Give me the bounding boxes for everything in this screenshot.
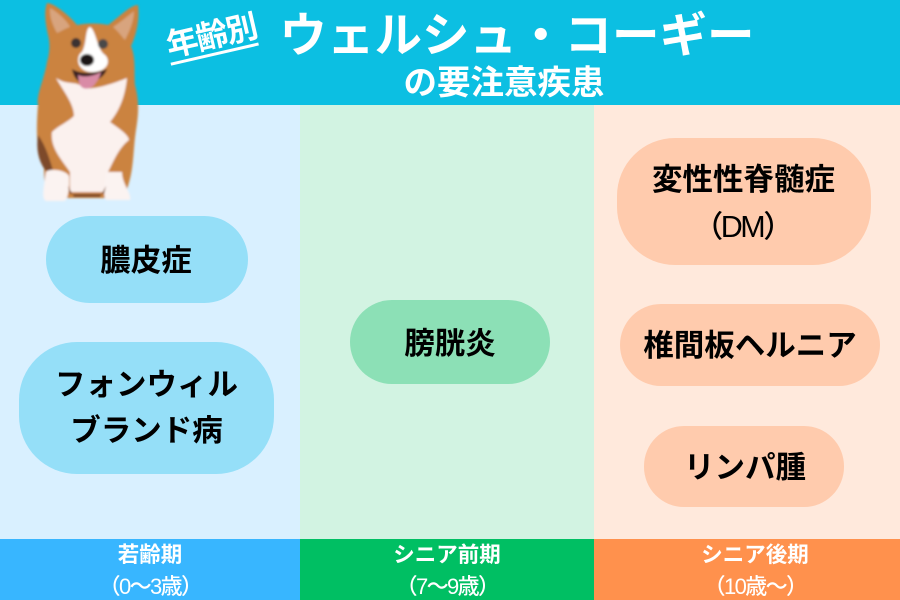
panel: early senior column xyxy=(300,105,594,539)
pill: skin disease: 膿皮症 xyxy=(100,244,192,278)
footer: late senior: （10歳〜） xyxy=(704,574,806,599)
footer: early senior: （7〜9歳） xyxy=(396,574,498,599)
footer: late senior: シニア後期 xyxy=(701,543,809,567)
pill: degenerative myelopathy: （DM） xyxy=(693,210,791,244)
footer: young: 若齢期 xyxy=(118,543,182,567)
header band xyxy=(0,0,900,105)
pill: lymphoma: リンパ腫 xyxy=(684,451,806,485)
pill: lymphoma xyxy=(644,426,844,507)
footer: late senior xyxy=(594,539,900,600)
footer: young xyxy=(0,539,300,600)
panel: late senior column xyxy=(594,105,900,539)
title: subtitle: の要注意疾患 xyxy=(404,65,604,102)
pill: von Willebrand disease: フォンウィル xyxy=(55,368,238,402)
footer: early senior: シニア前期 xyxy=(393,543,501,567)
pill: von Willebrand disease: ブランド病 xyxy=(70,414,223,448)
pill: cystitis xyxy=(350,300,550,384)
pill: disc herniation: 椎間板ヘルニア xyxy=(643,329,857,363)
icon: corgi xyxy=(35,2,140,202)
pill: degenerative myelopathy xyxy=(617,138,871,265)
pill: disc herniation xyxy=(620,304,880,386)
footer: young: （0〜3歳） xyxy=(99,574,201,599)
title: main: ウェルシュ・コーギー xyxy=(280,10,754,63)
pill: skin disease xyxy=(46,216,248,303)
label: by age tilted: 年齢別 xyxy=(163,8,260,64)
pill: degenerative myelopathy: 変性性脊髄症 xyxy=(652,163,835,197)
panel: young age column xyxy=(0,105,300,539)
footer: early senior xyxy=(300,539,594,600)
pill: von Willebrand disease xyxy=(19,342,274,474)
pill: cystitis: 膀胱炎 xyxy=(404,327,496,361)
